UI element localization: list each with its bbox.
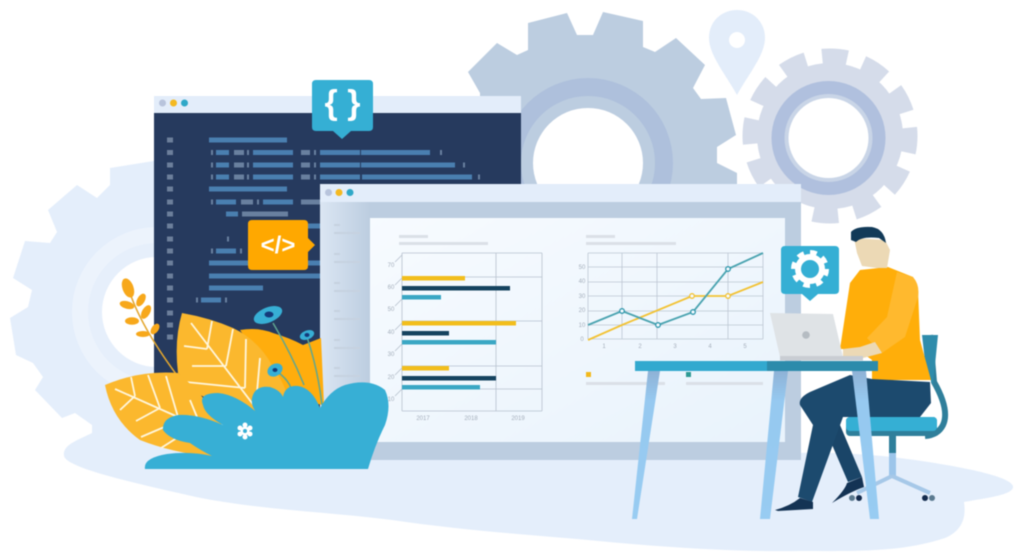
laptop — [770, 313, 863, 360]
bar chart: 10 — [388, 397, 395, 403]
bar chart: 2018 — [464, 416, 478, 422]
icon: small flower gear — [238, 422, 252, 440]
plant: yellow left leaf — [105, 372, 223, 457]
line chart: 30 — [579, 294, 586, 300]
bar chart: 30 — [388, 352, 395, 358]
line chart: 2 — [638, 344, 642, 350]
face — [854, 238, 890, 268]
back shoe — [832, 477, 864, 503]
bar chart — [388, 235, 542, 422]
line chart: 0 — [580, 337, 584, 343]
code editor window — [154, 96, 521, 413]
line chart — [579, 235, 763, 350]
bar chart: 70 — [388, 263, 395, 269]
front shoe — [775, 498, 813, 511]
line chart: 20 — [579, 308, 586, 314]
line chart: 10 — [579, 323, 586, 329]
bar chart: 40 — [388, 330, 395, 336]
left background gear — [10, 160, 330, 450]
bar chart: 60 — [388, 285, 395, 291]
bar chart: 2017 — [416, 416, 430, 422]
chair — [846, 335, 945, 501]
forearm — [867, 272, 918, 353]
small background gear — [743, 49, 917, 223]
dashboard window — [320, 184, 801, 460]
bar chart: 20 — [388, 375, 395, 381]
line chart: 50 — [579, 265, 586, 271]
bar chart: 2019 — [511, 416, 525, 422]
plant: flowers — [251, 302, 322, 405]
callout: gear — [781, 246, 839, 301]
callout: code tag: </> — [261, 232, 295, 259]
line chart: 5 — [743, 344, 747, 350]
plant: sprig — [119, 277, 176, 374]
plant: yellow centre leaf — [177, 313, 287, 425]
floor shape — [64, 430, 1013, 551]
callout: curly braces — [312, 80, 373, 139]
line chart: 4 — [708, 344, 712, 350]
bar chart: 50 — [388, 307, 395, 313]
thigh and front leg — [798, 375, 931, 502]
back leg — [830, 425, 862, 482]
hand — [843, 342, 882, 358]
callout: code tag — [248, 220, 315, 270]
line chart: 3 — [673, 344, 677, 350]
torso — [840, 267, 931, 380]
chart legend — [586, 372, 763, 385]
plant: blue bush — [145, 382, 388, 469]
callout: curly braces: { } — [325, 84, 360, 122]
line chart: 40 — [579, 279, 586, 285]
desk — [632, 361, 879, 519]
large background gear — [468, 12, 737, 248]
plant: orange back leaf — [240, 329, 324, 405]
sidebar labels — [334, 224, 360, 377]
hair — [851, 227, 886, 243]
location pin — [709, 10, 765, 95]
person — [775, 227, 931, 511]
line chart: 1 — [602, 344, 606, 350]
